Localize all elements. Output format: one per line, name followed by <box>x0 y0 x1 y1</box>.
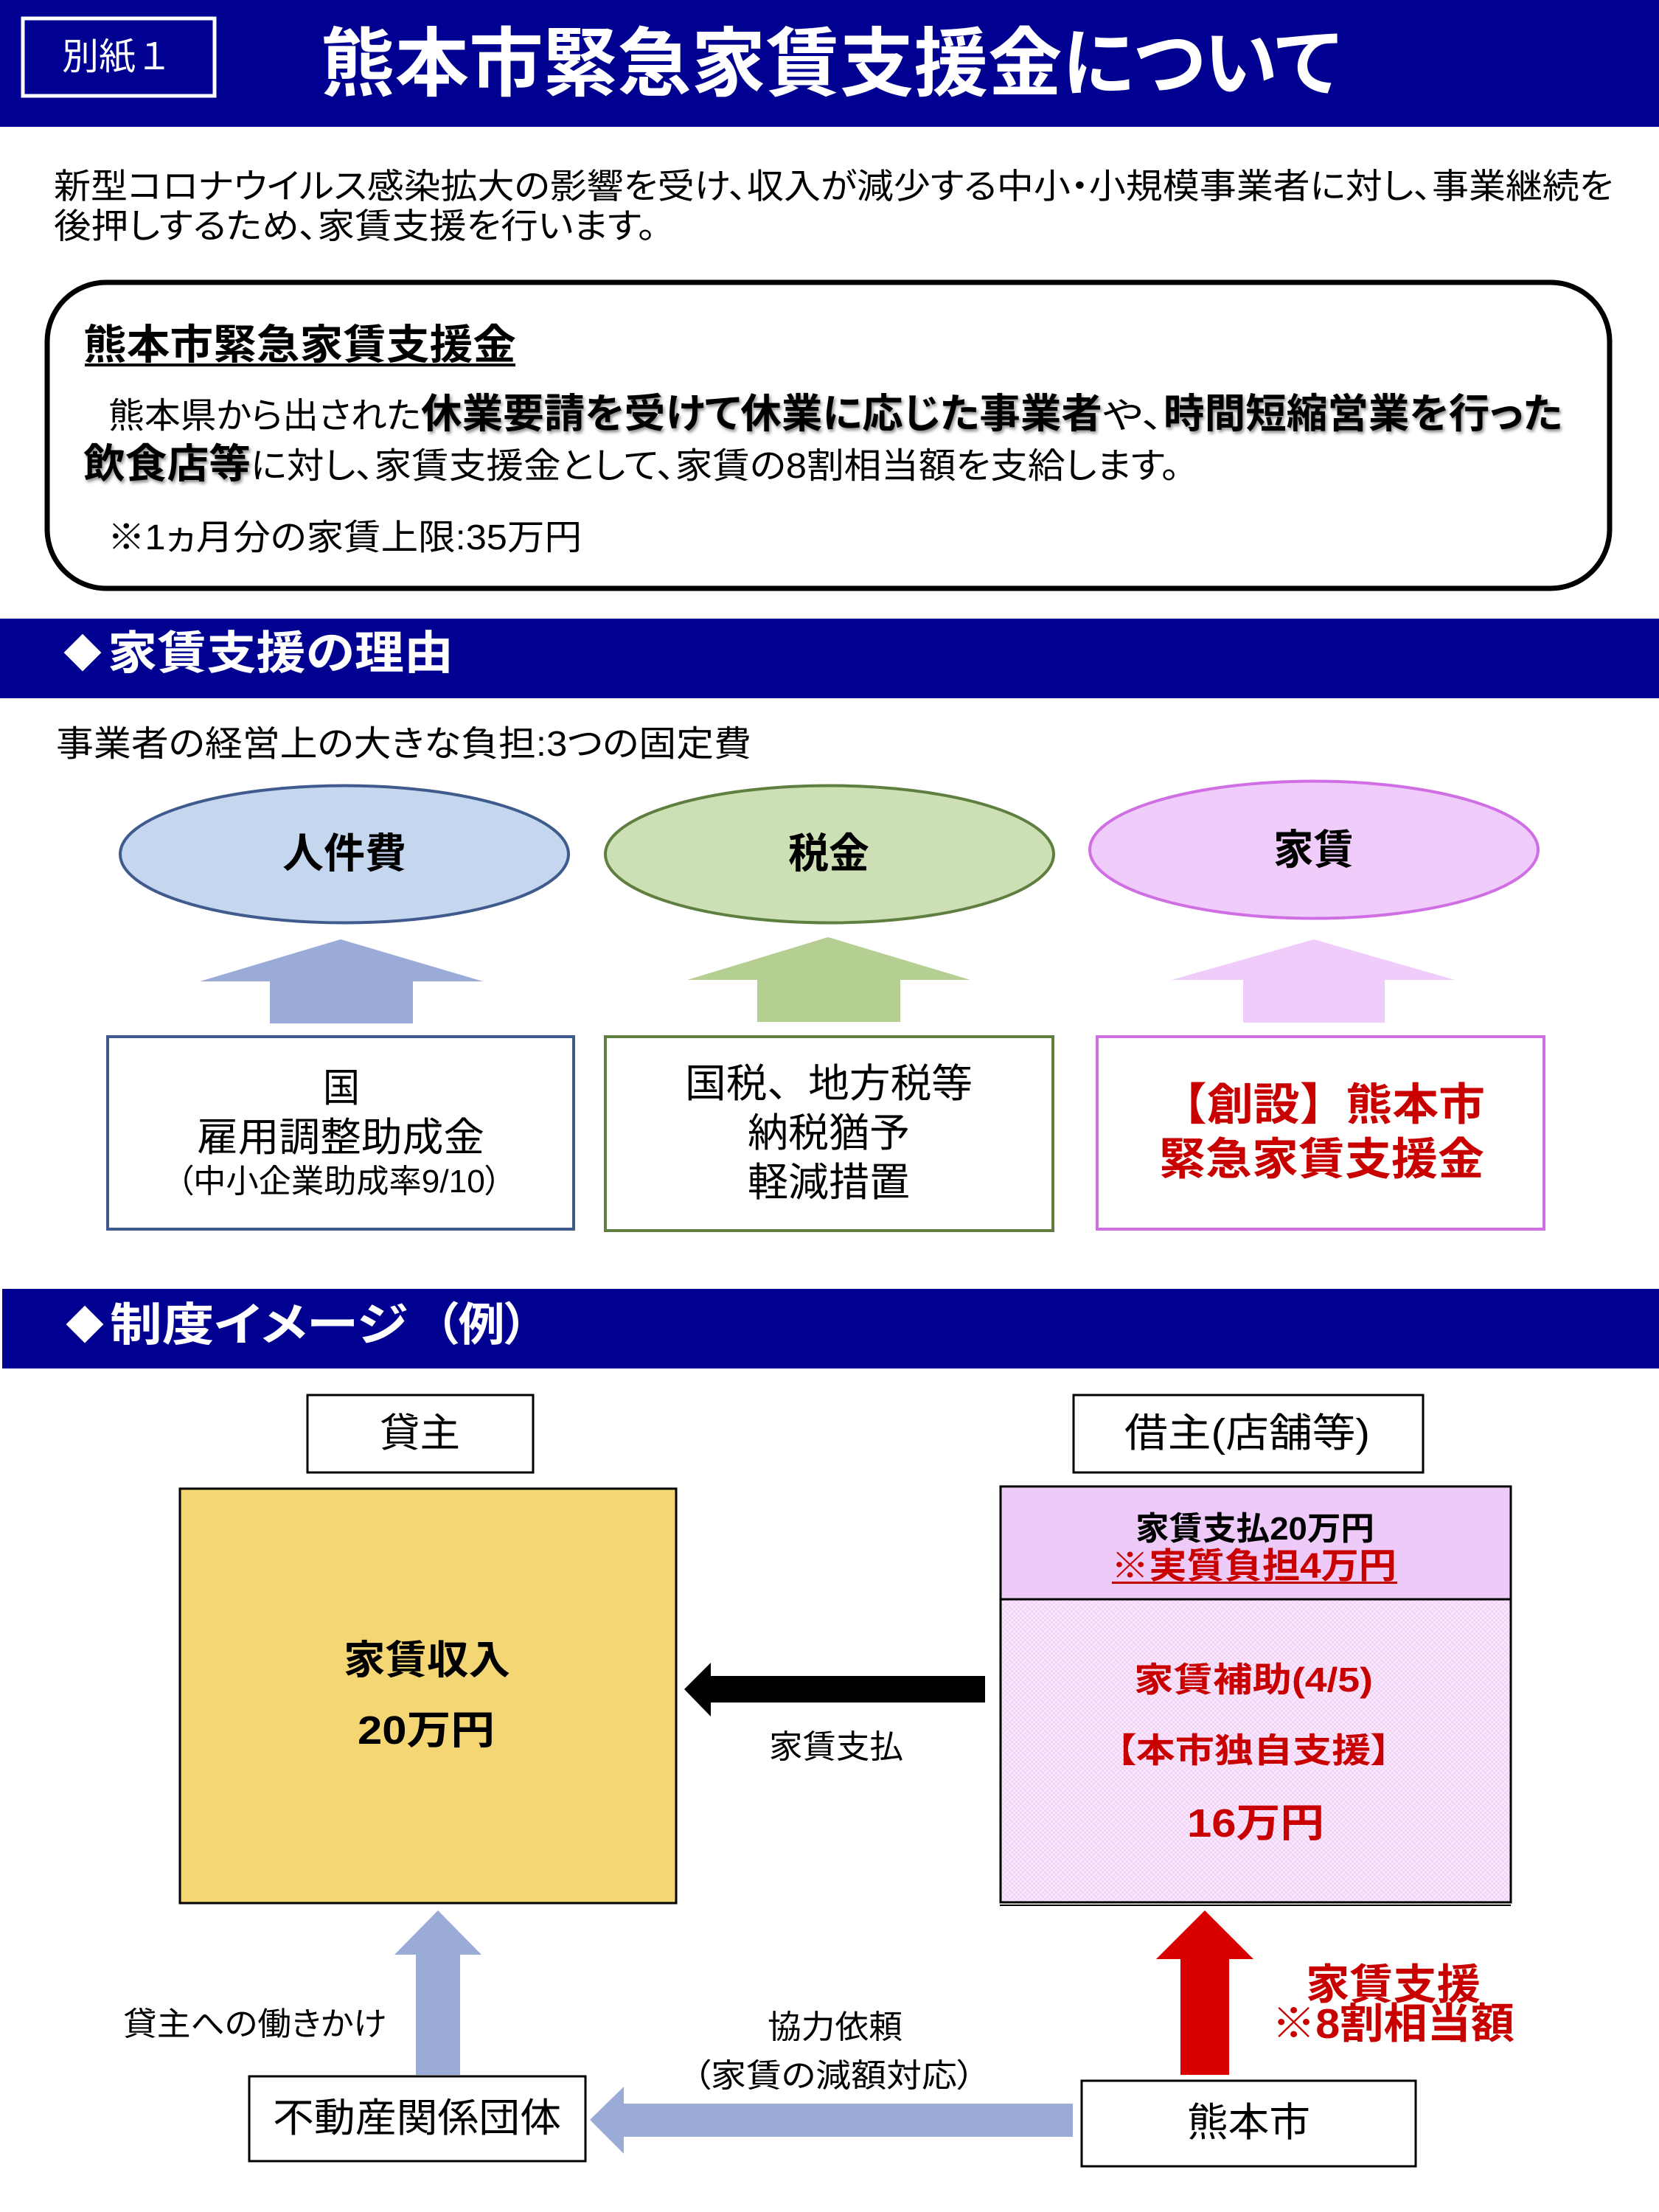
tenant payment block: 家賃支払20万円 <box>1135 1511 1374 1547</box>
subsidy block: 家賃補助(4/5) <box>1134 1660 1373 1699</box>
attachment label box: 別紙１ <box>62 36 173 77</box>
box: new rent support: 緊急家賃支援金 <box>1159 1135 1484 1184</box>
rent cap note: ※1ヵ月分の家賃上限:35万円 <box>108 518 582 557</box>
tenant payment block: ※実質負担4万円 <box>1111 1547 1397 1586</box>
box: tax deferral: 納税猶予 <box>748 1111 910 1155</box>
panel: rental income: 家賃収入 <box>344 1638 510 1683</box>
box: Kumamoto city: 熊本市 <box>1187 2101 1310 2145</box>
header band <box>0 0 1659 127</box>
subsidy block <box>1000 1599 1511 1906</box>
box: Kumamoto city <box>1082 2081 1416 2166</box>
rent support callout: 家賃支援 <box>1306 1961 1481 2008</box>
summary text line 1: 時間短縮営業を行った <box>1164 391 1562 437</box>
landlord outreach label: 貸主への働きかけ <box>123 2006 386 2042</box>
arrow: up blue <box>200 939 483 1023</box>
summary text line 1: 休業要請を受けて休業に応じた事業者 <box>421 391 1102 437</box>
cooperation request label: 協力依頼 <box>768 2009 902 2045</box>
box: new rent support: 【創設】熊本市 <box>1161 1080 1485 1130</box>
label: tenant: 借主(店舗等) <box>1124 1411 1370 1455</box>
summary text line 2: に対し、家賃支援金として、家賃の8割相当額を支給します。 <box>251 447 1180 486</box>
subsidy block: 16万円 <box>1187 1801 1324 1846</box>
box: real estate associations: 不動産関係団体 <box>273 2096 561 2140</box>
ellipse: taxes <box>605 786 1054 923</box>
section heading: reasons: 家賃支援の理由 <box>108 628 453 679</box>
ellipse: labour cost: 人件費 <box>282 830 406 877</box>
rent support callout: ※8割相当額 <box>1272 2000 1514 2048</box>
label: tenant <box>1074 1395 1423 1472</box>
arrow: city support up <box>1156 1910 1253 2075</box>
label: landlord: 貸主 <box>380 1411 460 1455</box>
ellipse: rent <box>1090 782 1538 919</box>
subsidy block: 【本市独自支援】 <box>1116 1731 1391 1770</box>
panel heading: 熊本市緊急家賃支援金 <box>83 321 516 368</box>
cooperation request label <box>693 2009 975 2094</box>
ellipse: taxes: 税金 <box>788 830 869 877</box>
section heading: scheme image: （例） <box>435 1300 528 1351</box>
summary text line 2: 飲食店等 <box>83 441 251 487</box>
panel: rental income: 20万円 <box>358 1708 495 1753</box>
ellipse: rent: 家賃 <box>1273 827 1354 873</box>
section heading: reasons: ◆ <box>63 633 102 676</box>
panel: rental income <box>180 1489 676 1903</box>
column: rent <box>1090 782 1544 1229</box>
rent support callout <box>1272 1961 1514 2048</box>
summary text line 1 <box>108 391 1562 437</box>
section heading: scheme image <box>2 1289 1659 1368</box>
box: employment subsidy: 雇用調整助成金 <box>197 1116 484 1160</box>
box: new rent support <box>1097 1037 1544 1229</box>
intro text <box>54 167 1613 246</box>
arrow: cooperation request <box>590 2087 1073 2154</box>
box: employment subsidy <box>108 1037 574 1229</box>
arrow: up pink <box>1172 939 1455 1023</box>
tenant payment block <box>1001 1486 1511 1599</box>
column: taxes <box>605 786 1054 1231</box>
section heading: reasons <box>0 619 1659 698</box>
intro text: 後押しするため、家賃支援を行います。 <box>54 206 656 246</box>
box: tax deferral <box>605 1037 1053 1231</box>
label: landlord <box>307 1395 533 1472</box>
arrow: up to landlord <box>394 1910 481 2075</box>
intro text: 新型コロナウイルス感染拡大の影響を受け、収入が減少する中小・小規模事業者に対し、事業継続を <box>54 167 1613 206</box>
summary text line 1: 熊本県から出された <box>108 397 421 436</box>
section heading: scheme image: 制度イメージ <box>110 1300 408 1351</box>
panel: rent support summary <box>47 282 1610 588</box>
arrow: up green <box>687 937 970 1022</box>
box: tax deferral: 軽減措置 <box>748 1161 910 1205</box>
rent payment label: 家賃支払 <box>769 1729 903 1765</box>
column: labour cost <box>108 786 574 1229</box>
arrow: rent payment <box>684 1663 985 1717</box>
attachment label box <box>23 18 215 96</box>
section heading: scheme image: ◆ <box>66 1305 104 1348</box>
title: 熊本市緊急家賃支援金について <box>321 22 1340 106</box>
fixed costs lead text: 事業者の経営上の大きな負担:3つの固定費 <box>56 725 751 764</box>
ellipse: labour cost <box>120 786 568 923</box>
cooperation request label: （家賃の減額対応） <box>693 2058 975 2094</box>
panel: tenant rent breakdown <box>1000 1486 1511 1906</box>
box: employment subsidy: 国 <box>323 1066 360 1110</box>
box: tax deferral: 国税、地方税等 <box>685 1062 973 1106</box>
box: real estate associations <box>249 2076 585 2161</box>
box: employment subsidy: （中小企業助成率9/10） <box>177 1164 501 1200</box>
summary text line 1: や、 <box>1102 397 1164 436</box>
summary text line 2 <box>83 441 1180 487</box>
